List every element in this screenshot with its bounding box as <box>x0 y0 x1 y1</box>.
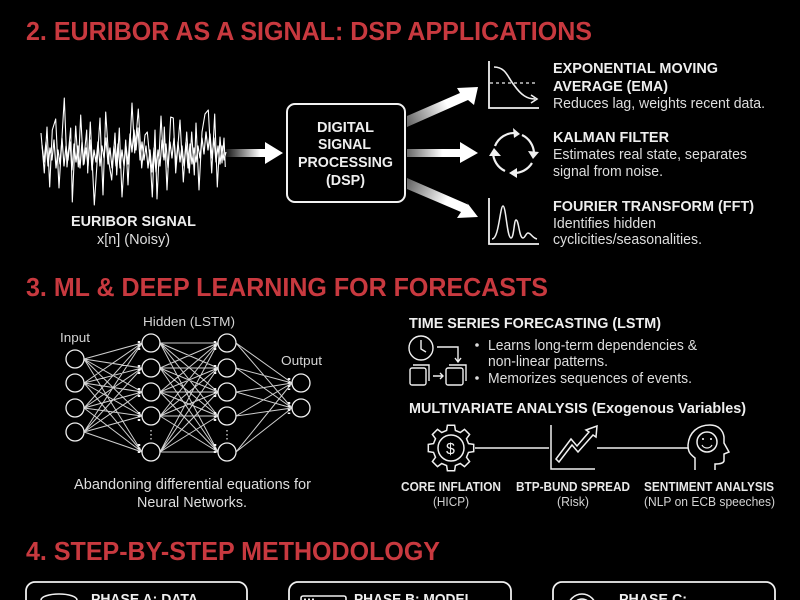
caption: neural networks <box>74 476 311 511</box>
text: EMA: EXPONENTIAL MOVING <box>553 60 718 77</box>
text: Fourier transform: cyclicities/seasonalities. <box>553 231 702 248</box>
icon: head with smiley <box>688 425 729 470</box>
icon: gear with dollar: $ <box>446 441 455 458</box>
label: BTP-Bund spread <box>516 479 630 509</box>
chart: neural network diagram: Hidden (LSTM) <box>143 314 235 329</box>
chart: neural network diagram: Input <box>60 330 90 345</box>
icon: Kalman loop arrows <box>489 128 539 178</box>
label: core inflation: (HICP) <box>433 494 469 509</box>
heading: time series forecasting: TIME SERIES FORECASTING (LSTM) <box>409 315 661 332</box>
text: EMA <box>553 60 765 112</box>
icon: EMA chart <box>489 61 539 108</box>
label: BTP-Bund spread: BTP-BUND SPREAD <box>516 479 630 494</box>
arrow: DSP to EMA <box>407 87 478 127</box>
panel: phase C <box>553 582 775 600</box>
text: LSTM bullets: Learns long-term dependencies & <box>488 337 697 354</box>
text: LSTM bullets <box>475 337 697 387</box>
text: Fourier transform: FOURIER TRANSFORM (FFT) <box>553 198 754 215</box>
text: Kalman filter: KALMAN FILTER <box>553 129 669 146</box>
arrow: DSP to FFT <box>407 178 478 218</box>
caption: neural networks: Abandoning differential equations for <box>74 476 311 493</box>
label: sentiment analysis <box>644 479 775 509</box>
text: EMA: Reduces lag, weights recent data. <box>553 95 765 112</box>
panel: phase B <box>289 582 511 600</box>
heading: section 4: 4. STEP-BY-STEP METHODOLOGY <box>26 536 440 566</box>
text: LSTM bullets: Memorizes sequences of events. <box>488 370 692 387</box>
panel: DSP box <box>287 104 405 202</box>
panel: DSP box: PROCESSING <box>298 154 393 171</box>
chart: noisy Euribor signal waveform <box>41 98 226 205</box>
connector lines between variables <box>475 447 688 449</box>
icon: rising spread chart <box>551 425 597 469</box>
icon: FFT spectrum <box>489 198 539 244</box>
text: Kalman filter <box>553 129 747 180</box>
label: sentiment analysis: (NLP on ECB speeches) <box>644 494 775 509</box>
text: EMA: AVERAGE (EMA) <box>553 78 668 95</box>
icon: gear with dollar <box>428 425 474 471</box>
panel: phase A <box>26 582 247 600</box>
label: Euribor signal: EURIBOR SIGNAL <box>71 213 196 230</box>
label: BTP-Bund spread: (Risk) <box>557 494 589 509</box>
heading: section 2: 2. EURIBOR AS A SIGNAL: DSP APPLICATIONS <box>26 16 592 46</box>
caption: neural networks: Neural Networks. <box>137 494 247 511</box>
text: Kalman filter: Estimates real state, separates <box>553 146 747 163</box>
panel: DSP box: (DSP) <box>326 172 365 189</box>
icon: clock and sequence <box>409 336 466 385</box>
panel: DSP box: SIGNAL <box>318 136 371 153</box>
label: Euribor signal: x[n] (Noisy) <box>97 231 170 248</box>
text: Fourier transform <box>553 198 754 248</box>
label: core inflation: CORE INFLATION <box>401 479 501 494</box>
arrow: DSP to Kalman <box>407 142 478 163</box>
label: sentiment analysis: SENTIMENT ANALYSIS <box>644 479 774 494</box>
label: core inflation <box>401 479 501 509</box>
arrow: signal to DSP <box>226 142 283 164</box>
chart: neural network diagram <box>60 314 322 461</box>
heading: section 3: 3. ML & DEEP LEARNING FOR FORECASTS <box>26 272 548 302</box>
label: Euribor signal <box>71 213 196 248</box>
chart: neural network diagram: Output <box>281 353 322 368</box>
text: Fourier transform: Identifies hidden <box>553 215 656 232</box>
heading: multivariate analysis: MULTIVARIATE ANALYSIS (Exogenous Variables) <box>409 400 746 417</box>
panel: DSP box: DIGITAL <box>317 119 374 136</box>
text: Kalman filter: signal from noise. <box>553 163 663 180</box>
text: LSTM bullets: non-linear patterns. <box>488 353 608 370</box>
